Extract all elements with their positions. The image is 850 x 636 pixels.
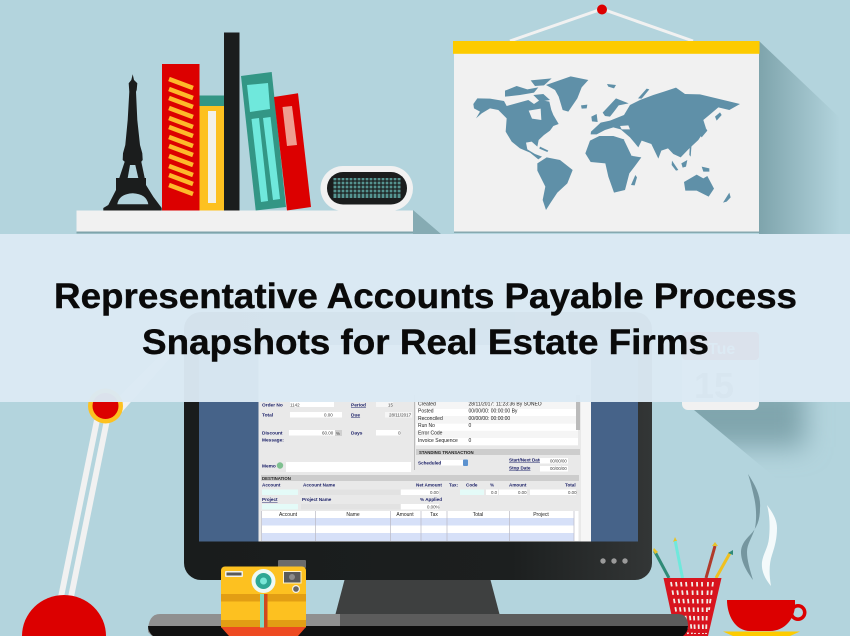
- invoice fields: Days: [351, 430, 363, 436]
- shelf: [76, 210, 441, 234]
- steam dark: [741, 474, 760, 580]
- invoice values: [290, 402, 412, 436]
- pencils: [654, 540, 730, 578]
- audit log table: 00/00/00: 00:00:00: [468, 416, 510, 422]
- pencil tips: [653, 537, 733, 555]
- invoice values: 60.00: [322, 430, 334, 436]
- invoice fields: Due: [351, 412, 360, 418]
- invoice fields: Total: [262, 412, 273, 418]
- lamp upper arm: [118, 350, 172, 412]
- destination section: Amount: [509, 482, 527, 488]
- destination section: Account Name: [303, 482, 336, 488]
- invoice fields: Discount: [262, 430, 283, 436]
- line items table: Project: [533, 512, 549, 518]
- destination section: 0.00: [430, 490, 439, 495]
- invoice values: 0: [398, 430, 401, 436]
- steam light: [762, 505, 777, 586]
- invoice values: %: [336, 431, 340, 436]
- standing transaction section: Scheduled: [418, 460, 441, 466]
- destination section: 0.0: [491, 490, 498, 495]
- audit log table: Invoice Sequence: [418, 438, 458, 444]
- destination section: 0.00: [568, 490, 577, 495]
- book: teal leaning: [241, 72, 286, 210]
- invoice fields: Order No: [262, 402, 283, 408]
- book: red leaning: [274, 93, 311, 210]
- destination section: %: [490, 482, 494, 488]
- desk lamp: [22, 350, 172, 636]
- shelf with objects: [76, 32, 441, 234]
- lamp base: [22, 595, 106, 636]
- title line 1: Representative Accounts Payable Process: [54, 276, 797, 316]
- lamp joint: [88, 388, 123, 424]
- desk surface: [148, 614, 688, 636]
- calendar weekday: Tue: [708, 341, 735, 358]
- line items table: [262, 511, 578, 541]
- icon: Eiffel tower: [103, 74, 162, 210]
- line items table: Total: [473, 512, 483, 518]
- world map: [473, 76, 740, 210]
- standing transaction section: [416, 449, 580, 472]
- invoice fields: Message:: [262, 438, 284, 444]
- coffee cup with steam: [723, 474, 806, 636]
- monitor bezel: [184, 312, 652, 580]
- book: black: [224, 32, 240, 210]
- title: [54, 276, 797, 362]
- audit log table: Reconciled: [418, 416, 443, 422]
- destination section: Account: [262, 482, 281, 488]
- calendar sheet: [682, 332, 759, 410]
- destination section: Tax:: [449, 482, 459, 488]
- monitor buttons: [600, 558, 628, 564]
- standing transaction section: Stop Date: [509, 466, 531, 470]
- destination section: Project: [262, 497, 278, 502]
- icon: digital clock: [320, 166, 413, 211]
- wall calendar: [682, 402, 818, 460]
- line items table: Tax: [430, 512, 438, 518]
- audit log table: Created: [418, 402, 436, 408]
- calendar header: [682, 332, 759, 360]
- destination section: % Applied: [420, 497, 442, 502]
- invoice fields: Period: [351, 402, 366, 408]
- calendar date: 15: [694, 365, 734, 406]
- saucer: [723, 632, 800, 636]
- audit log table: Error Code: [418, 430, 443, 436]
- audit log table: [414, 395, 580, 470]
- audit log table: 0: [468, 423, 472, 429]
- audit log table: 00/00/00: 00:00:00 By: [468, 408, 518, 414]
- book: yellow: [200, 96, 224, 210]
- destination section: 0.00: [518, 490, 527, 495]
- audit log table: Posted: [418, 408, 434, 414]
- translucent title band: [0, 234, 850, 402]
- audit log table: Run No: [418, 423, 435, 429]
- monitor screen: [199, 330, 638, 542]
- standing transaction section: Start/Next Date: [509, 458, 542, 462]
- standing transaction section: STANDING TRANSACTION: [419, 450, 474, 455]
- invoice values: 28/11/2017: [389, 412, 412, 418]
- hanging strings and pin: [510, 4, 693, 41]
- invoice values: 1142: [290, 402, 300, 408]
- line items table: Account: [279, 512, 298, 518]
- book: red striped: [162, 64, 200, 210]
- destination section: 0.00%: [427, 504, 440, 510]
- icon: instant camera: [221, 560, 306, 636]
- destination section: Net Amount: [416, 482, 442, 488]
- audit log table: 28/11/2017: 11:23:36 By SONEO: [468, 402, 542, 408]
- invoice values: 0.00: [324, 412, 333, 418]
- cup body: [664, 578, 722, 636]
- monitor stand: [335, 578, 500, 616]
- pencil holder: [653, 537, 733, 636]
- standing transaction section: 00/00/00: [550, 466, 567, 471]
- cup mesh holes: [671, 582, 713, 634]
- destination section: Code: [466, 482, 478, 488]
- title line 2: Snapshots for Real Estate Firms: [142, 322, 709, 362]
- destination section: Project Name: [302, 497, 332, 502]
- wall map poster: [453, 4, 840, 234]
- invoice values: 15: [388, 402, 394, 408]
- destination section: DESTINATION: [262, 476, 291, 481]
- line items table: Amount: [396, 512, 414, 518]
- accounting software window: [258, 345, 591, 542]
- calendar shadow: [694, 402, 818, 460]
- poster sheet: [453, 41, 760, 233]
- lamp lower arm: [58, 420, 110, 597]
- destination section: Total: [565, 482, 576, 488]
- invoice fields: Memo: [262, 464, 276, 470]
- desktop monitor: [184, 312, 652, 616]
- poster shadow: [759, 41, 840, 234]
- audit log table: 0: [468, 438, 472, 444]
- invoice fields: [262, 402, 412, 472]
- line items table: Name: [346, 512, 360, 518]
- cup: [727, 600, 806, 631]
- destination section: [261, 475, 579, 510]
- standing transaction section: 00/00/00: [550, 458, 567, 464]
